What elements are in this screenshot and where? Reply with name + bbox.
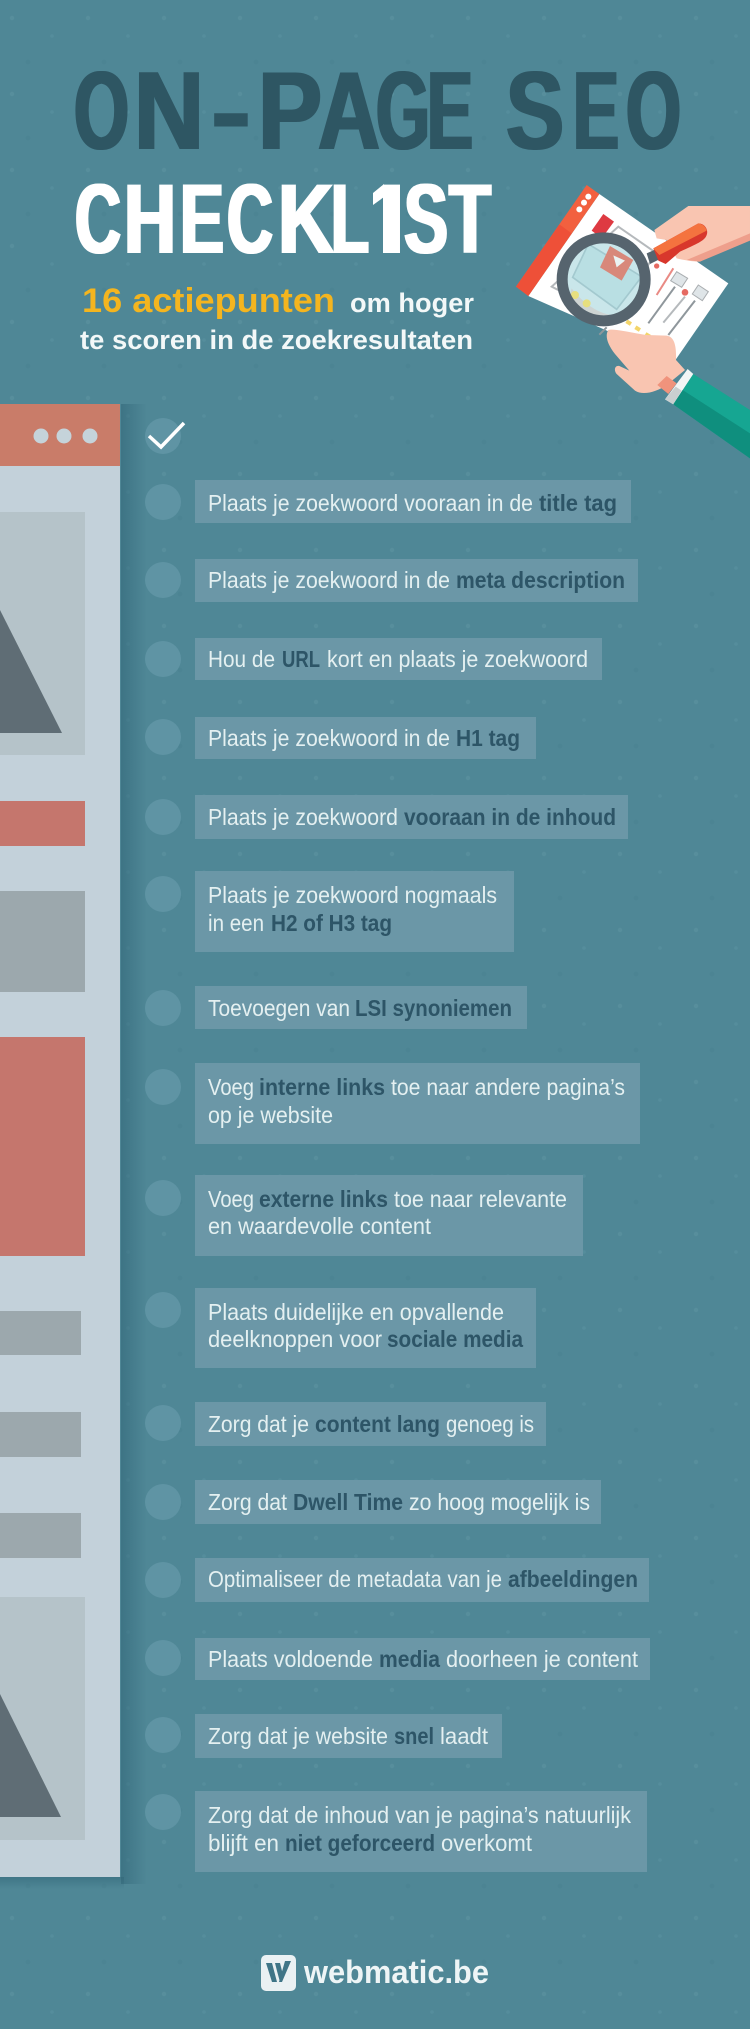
item text: toe naar andere pagina’s xyxy=(391,1074,625,1100)
item text: Zorg dat xyxy=(208,1489,288,1515)
title: ON-PAGE SEO: A xyxy=(318,49,380,173)
item text: URL xyxy=(282,646,320,672)
gray bar 1 xyxy=(0,1311,81,1355)
panel shadow xyxy=(0,404,147,1889)
item text: deelknoppen voor xyxy=(208,1326,382,1352)
item text: overkomt xyxy=(441,1830,533,1856)
item text: Plaats duidelijke en opvallende xyxy=(208,1299,504,1325)
checklist item 13 xyxy=(145,1558,649,1602)
item text xyxy=(208,1299,523,1352)
image placeholder top xyxy=(0,512,85,755)
checklist item 2 xyxy=(145,559,638,602)
item text: en waardevolle content xyxy=(208,1213,432,1239)
item bar xyxy=(195,1288,536,1368)
item text: Voeg xyxy=(208,1074,254,1100)
checkbox xyxy=(145,484,181,520)
checklist item 1 xyxy=(145,480,631,523)
item text: toe naar relevante xyxy=(394,1186,567,1212)
panel: browser window xyxy=(0,404,147,1889)
item text: afbeeldingen xyxy=(508,1566,638,1592)
item text xyxy=(208,1074,625,1128)
item bar xyxy=(195,1791,647,1872)
item text: in een xyxy=(208,910,264,936)
item text: Toevoegen van xyxy=(208,995,350,1021)
item text: snel xyxy=(394,1723,434,1749)
item text: zo hoog mogelijk is xyxy=(409,1489,590,1515)
title: ON-PAGE SEO: P xyxy=(258,49,322,173)
window dots xyxy=(34,428,98,444)
checkbox xyxy=(145,641,181,677)
title: CHECKLIST: K xyxy=(278,163,334,274)
checkbox xyxy=(145,1640,181,1676)
checkbox xyxy=(145,1794,181,1830)
title: CHECKLIST: L xyxy=(331,163,369,274)
document header xyxy=(516,185,599,296)
item text: niet geforceerd xyxy=(285,1830,435,1856)
item text: LSI synoniemen xyxy=(355,995,512,1021)
title: ON-PAGE SEO: G xyxy=(376,49,430,173)
checklist item 6 xyxy=(145,871,514,952)
checklist item 10 xyxy=(145,1288,536,1368)
item bar xyxy=(195,480,631,523)
item bar xyxy=(195,871,514,952)
checklist item 16 xyxy=(145,1791,647,1872)
checked checkbox xyxy=(145,418,184,454)
checklist item 3 xyxy=(145,638,602,680)
item text xyxy=(208,1802,631,1856)
item bar xyxy=(195,1063,640,1144)
document page xyxy=(528,194,728,361)
item text: Voeg xyxy=(208,1186,254,1212)
lower hand xyxy=(607,330,685,393)
item bar xyxy=(195,1638,650,1680)
checkbox xyxy=(145,990,181,1026)
item text: vooraan in de inhoud xyxy=(404,804,616,830)
checkbox xyxy=(145,719,181,755)
title: ON-PAGE SEO: E xyxy=(427,49,473,173)
checklist item 7 xyxy=(145,986,527,1029)
item bar xyxy=(195,1480,601,1524)
checklist item 11 xyxy=(145,1402,546,1446)
item text: blijft en xyxy=(208,1830,279,1856)
checklist item 5 xyxy=(145,795,628,839)
title: CHECKLIST: H xyxy=(124,163,176,274)
browser header xyxy=(0,404,120,466)
item text: interne links xyxy=(259,1074,385,1100)
subtitle: 16 actiepunten xyxy=(82,282,335,320)
checklist item 12 xyxy=(145,1480,601,1524)
item text: H2 of H3 tag xyxy=(271,910,392,936)
item text: Plaats je zoekwoord in de xyxy=(208,567,450,593)
item bar xyxy=(195,1175,583,1256)
item text: laadt xyxy=(440,1723,489,1749)
subtitle: te scoren in de zoekresultaten xyxy=(80,325,473,355)
checklist item 14 xyxy=(145,1638,650,1680)
item text: Plaats voldoende xyxy=(208,1646,373,1672)
item text: Zorg dat je xyxy=(208,1411,309,1437)
title: ON-PAGE SEO: S xyxy=(506,49,564,173)
item bar xyxy=(195,1402,546,1446)
upper hand xyxy=(654,206,750,262)
magnifier lens xyxy=(562,238,645,321)
checkbox xyxy=(145,1069,181,1105)
title: ON-PAGE SEO: N xyxy=(134,49,204,173)
item text: genoeg is xyxy=(446,1411,534,1437)
shirt cuff xyxy=(665,369,693,404)
item text: Plaats je zoekwoord in de xyxy=(208,725,450,751)
title: CHECKLIST: S xyxy=(404,163,448,274)
checkbox xyxy=(145,1484,181,1520)
item bar xyxy=(195,1558,649,1602)
logo: webmatic.be xyxy=(261,1954,489,1991)
gray bar 2 xyxy=(0,1412,81,1457)
gray block xyxy=(0,891,85,992)
logo icon xyxy=(261,1955,296,1991)
checkbox xyxy=(145,1717,181,1753)
checkbox xyxy=(145,1180,181,1216)
title: CHECKLIST: C xyxy=(227,163,273,274)
item text: media xyxy=(379,1646,440,1672)
item text: Plaats je zoekwoord xyxy=(208,804,398,830)
item text: content lang xyxy=(315,1411,440,1437)
title: CHECKLIST: C xyxy=(75,163,121,274)
checkbox xyxy=(145,1405,181,1441)
page sliders xyxy=(599,268,695,335)
item bar xyxy=(195,559,638,602)
subtitle: om hoger xyxy=(350,288,474,318)
checklist item 8 xyxy=(145,1063,640,1144)
item bar xyxy=(195,986,527,1029)
red block xyxy=(0,1037,85,1256)
item bar xyxy=(195,717,536,759)
title: ON-PAGE SEO: - xyxy=(211,49,251,173)
subtitle xyxy=(80,282,474,355)
checklist item 9 xyxy=(145,1175,583,1256)
checklist item 15 xyxy=(145,1714,502,1758)
item text: Plaats je zoekwoord nogmaals xyxy=(208,882,497,908)
browser body xyxy=(0,404,120,1877)
title: ON-PAGE SEO: O xyxy=(626,49,681,173)
sleeve xyxy=(673,374,750,458)
item text: title tag xyxy=(539,490,617,516)
item text: Hou de xyxy=(208,646,275,672)
item text: Dwell Time xyxy=(293,1489,403,1515)
magnifier handle xyxy=(647,223,707,264)
gray bar 3 xyxy=(0,1513,81,1558)
item text: meta description xyxy=(456,567,625,593)
item bar xyxy=(195,1714,502,1758)
item text: doorheen je content xyxy=(446,1646,639,1672)
title: CHECKLIST: I xyxy=(378,163,405,274)
title: CHECKLIST xyxy=(75,163,491,274)
checkbox xyxy=(145,799,181,835)
illustration: hands with magnifier over a web page xyxy=(516,185,750,458)
item text xyxy=(208,1186,567,1239)
checklist item 4 xyxy=(145,717,536,759)
checkbox xyxy=(145,562,181,598)
logo text: webmatic.be xyxy=(303,1954,489,1990)
red bar xyxy=(0,801,85,846)
item text: op je website xyxy=(208,1102,333,1128)
item bar xyxy=(195,795,628,839)
item text: H1 tag xyxy=(456,725,520,751)
checkbox xyxy=(145,1562,181,1598)
item text: kort en plaats je zoekwoord xyxy=(327,646,588,672)
item text: Zorg dat je website xyxy=(208,1723,388,1749)
title: CHECKLIST: T xyxy=(449,163,491,274)
item bar xyxy=(195,638,602,680)
title: ON-PAGE SEO: O xyxy=(74,49,129,173)
image placeholder bottom xyxy=(0,1597,85,1840)
title: CHECKLIST: E xyxy=(180,163,224,274)
item text xyxy=(208,882,497,936)
item text: Optimaliseer de metadata van je xyxy=(208,1566,502,1592)
item text: sociale media xyxy=(387,1326,523,1352)
item text: externe links xyxy=(259,1186,388,1212)
item text: Plaats je zoekwoord vooraan in de xyxy=(208,490,533,516)
item text: Zorg dat de inhoud van je pagina’s natuurlijk xyxy=(208,1802,631,1828)
title: ON-PAGE SEO: E xyxy=(573,49,619,173)
checkbox xyxy=(145,876,181,912)
checkbox xyxy=(145,1292,181,1328)
